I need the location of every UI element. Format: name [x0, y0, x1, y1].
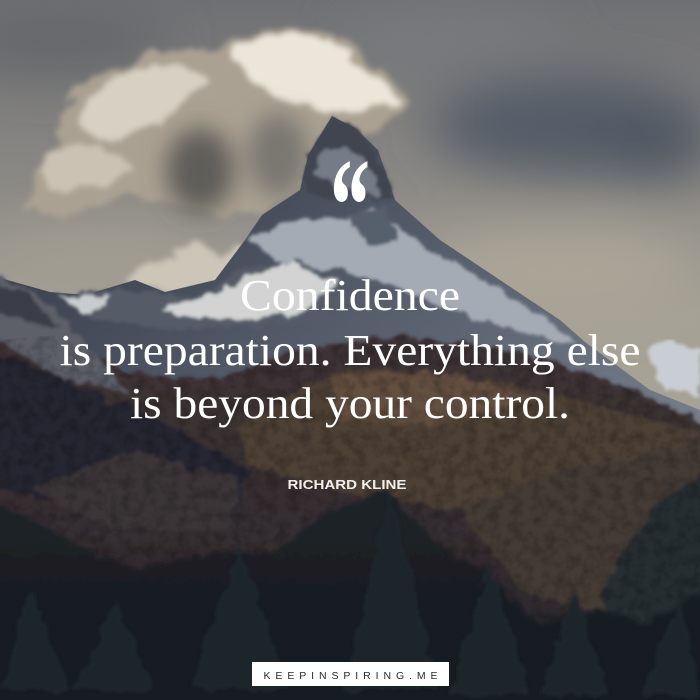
brand badge: KEEPINSPIRING.ME [264, 670, 438, 682]
author: RICHARD KLINE [288, 477, 407, 492]
quote text: is preparation. Everything else [60, 326, 640, 375]
rock grain texture [0, 330, 700, 630]
quote text [60, 271, 640, 428]
pine forest [0, 490, 700, 700]
brand badge [252, 662, 449, 686]
low cloud [128, 243, 258, 296]
distant right snow ridge [645, 342, 700, 396]
cloud behind the summit [28, 29, 402, 214]
quote text: is beyond your control. [130, 379, 570, 428]
lower brown slopes [0, 275, 700, 700]
quote text: Confidence [240, 271, 460, 320]
quotation mark: “ [330, 132, 370, 281]
